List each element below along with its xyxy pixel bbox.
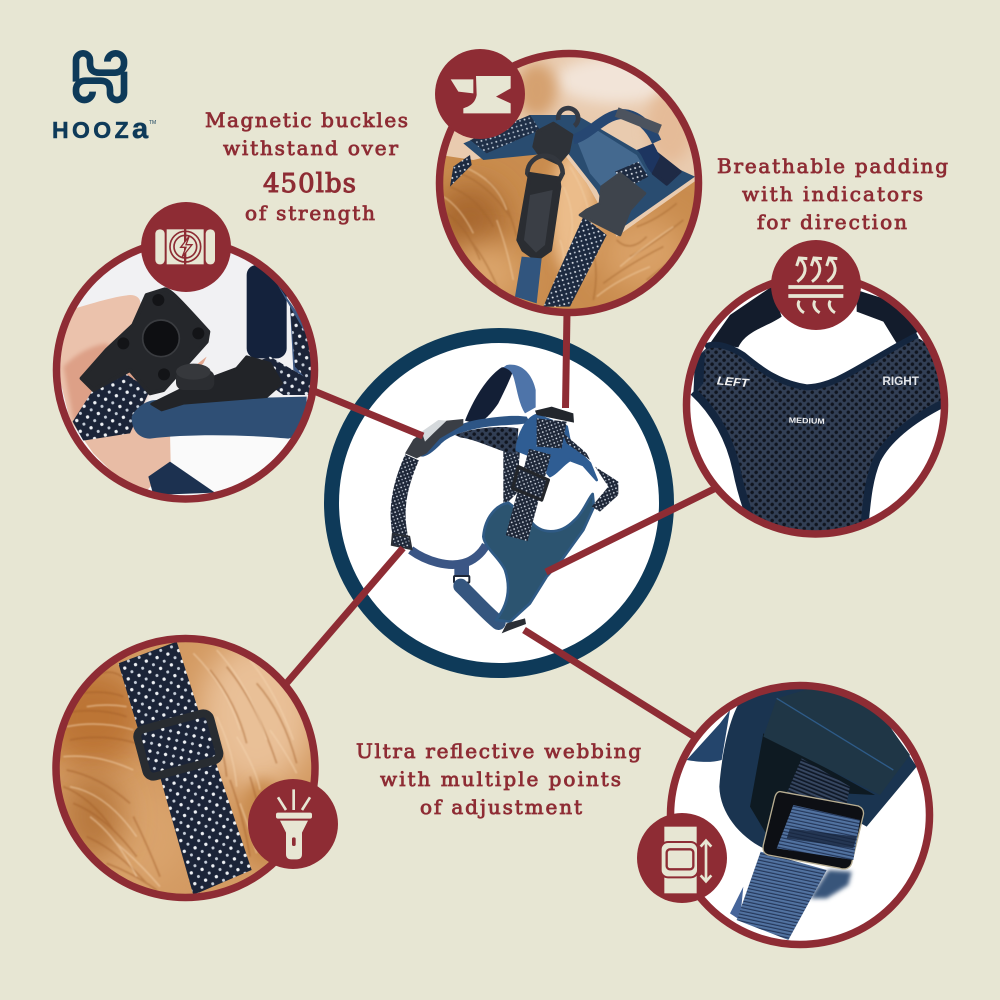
photo — [690, 288, 941, 530]
text: breathable padding: with indicators — [742, 182, 923, 206]
icon: anvil — [435, 49, 525, 139]
panel: top photo buckle — [430, 40, 710, 320]
icon: magnetic buckle — [141, 202, 231, 292]
panel: left photo magnetic buckle — [50, 200, 320, 510]
text: magnetic buckles — [205, 108, 408, 225]
icon: heat layers — [771, 240, 861, 330]
connector lines — [285, 312, 716, 737]
text: reflective webbing: of adjustment — [420, 795, 582, 819]
label: RIGHT: RIGHT — [882, 375, 919, 388]
ring — [440, 54, 698, 312]
panel: bottom right photo adjuster — [630, 680, 940, 950]
ring — [56, 638, 315, 898]
icon: flashlight — [248, 779, 338, 869]
text: reflective webbing: with multiple points — [380, 767, 621, 791]
panel: central harness — [332, 336, 666, 670]
panel: bottom left photo webbing — [52, 634, 338, 902]
photo — [674, 689, 926, 941]
text: reflective webbing — [356, 739, 641, 819]
text: magnetic buckles: of strength — [245, 201, 375, 225]
photo — [60, 642, 312, 894]
text: magnetic buckles: 450lbs — [263, 169, 356, 199]
label: MEDIUM: MEDIUM — [789, 416, 825, 426]
logo wordmark: HOOZa — [52, 113, 152, 145]
ring — [686, 276, 944, 534]
icon: adjuster — [637, 813, 727, 903]
ring — [670, 686, 930, 944]
text: reflective webbing: Ultra reflective webbing — [356, 739, 641, 763]
photo — [443, 57, 695, 309]
panel: right photo breathable padding — [680, 240, 960, 540]
logo: Hooza — [52, 53, 156, 145]
harness illustration — [392, 365, 618, 633]
text: magnetic buckles: Magnetic buckles — [205, 108, 408, 132]
text: breathable padding — [717, 154, 948, 234]
text: magnetic buckles: withstand over — [223, 136, 398, 160]
central circle — [332, 336, 666, 670]
logo mark — [76, 53, 124, 100]
ring — [56, 241, 314, 499]
label: LEFT: LEFT — [716, 374, 750, 390]
photo — [60, 252, 311, 496]
text: breathable padding: for direction — [757, 210, 907, 234]
trademark: TM — [149, 120, 156, 126]
text: breathable padding: Breathable padding — [717, 154, 948, 178]
